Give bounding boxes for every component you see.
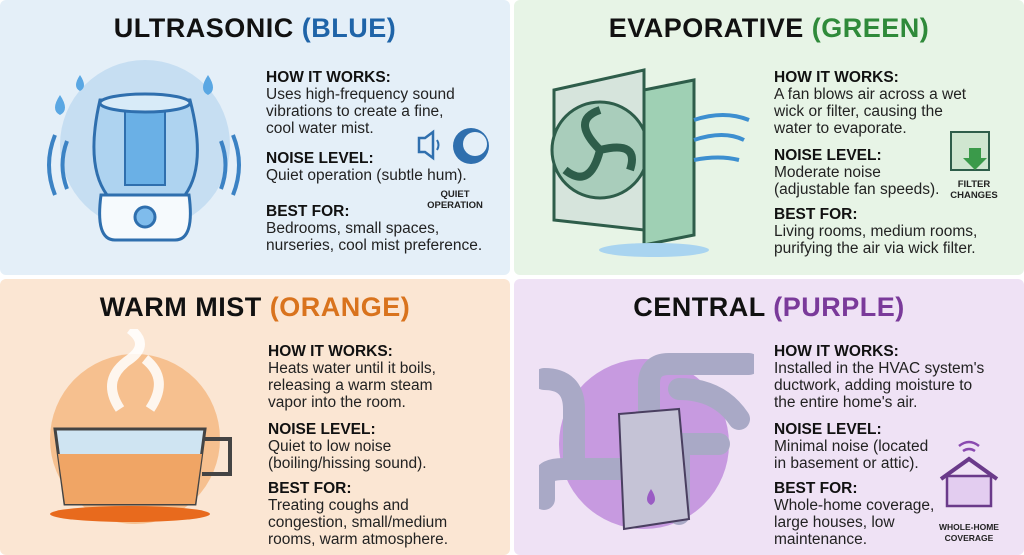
text block: in basement or attic). Whole-home coverage, [774,455,934,514]
title: EVAPORATIVE (GREEN) [609,13,929,43]
icon: quiet operation: QUIET [440,189,470,200]
panel: ultrasonic [0,0,510,275]
text block: (adjustable fan speeds). Living rooms, medium rooms, [774,181,977,240]
illustration: fan and wick [550,68,750,257]
text block: HOW IT WORKS: [266,69,391,86]
illustration: humidifier [47,60,241,242]
text block [774,343,984,548]
icon: filter changes: CHANGES [950,190,998,201]
text block: Heats water until it boils, [268,360,436,377]
text block: rooms, warm atmosphere. [268,531,448,548]
icon: quiet operation [418,128,489,211]
text block: NOISE LEVEL: [266,150,374,167]
text block: releasing a warm steam [268,377,433,394]
text block: large houses, low [774,514,895,531]
text block: congestion, small/medium [268,514,447,531]
panel: central [514,279,1024,555]
text block: Installed in the HVAC system's [774,360,984,377]
icon: whole-home coverage: WHOLE-HOME [939,522,999,532]
title: ULTRASONIC (BLUE) [114,13,396,43]
text block: (boiling/hissing sound). Treating coughs and [268,455,427,514]
text block: HOW IT WORKS: [774,343,899,360]
text block: BEST FOR: [774,480,858,497]
text block [268,343,448,548]
illustration: HVAC unit [539,353,754,530]
text block: wick or filter, causing the [774,103,943,120]
icon: filter changes: FILTER [958,179,990,190]
text block: BEST FOR: [266,203,350,220]
illustration: boiling pot [50,329,232,524]
text block: nurseries, cool mist preference. [266,237,482,254]
panel: evaporative [514,0,1024,275]
text block: NOISE LEVEL: [774,421,882,438]
text block: HOW IT WORKS: [268,343,393,360]
text block: NOISE LEVEL: [268,421,376,438]
icon: quiet operation: OPERATION [427,200,483,211]
icon: whole-home coverage [939,440,999,543]
text block [774,69,977,257]
text block: cool water mist. Quiet operation (subtle hum). Bedrooms, small spaces, [266,120,467,237]
text block: ductwork, adding moisture to [774,377,972,394]
text block: vapor into the room. Quiet to low noise [268,394,406,455]
icon: whole-home coverage: COVERAGE [945,533,993,543]
text block: purifying the air via wick filter. [774,240,976,257]
text block: Uses high-frequency sound [266,86,455,103]
text block: BEST FOR: [268,480,352,497]
text block: maintenance. [774,531,867,548]
text block: vibrations to create a fine, [266,103,444,120]
text block: A fan blows air across a wet [774,86,966,103]
text block: HOW IT WORKS: [774,69,899,86]
title: CENTRAL (PURPLE) [633,292,905,322]
icon: filter changes [950,131,998,201]
text block: BEST FOR: [774,206,858,223]
panel: warm mist [0,279,510,555]
text block: NOISE LEVEL: [774,147,882,164]
text block [266,69,482,254]
text block: water to evaporate. Moderate noise [774,120,907,181]
text block: the entire home's air. Minimal noise (located [774,394,928,455]
title: WARM MIST (ORANGE) [100,292,410,322]
